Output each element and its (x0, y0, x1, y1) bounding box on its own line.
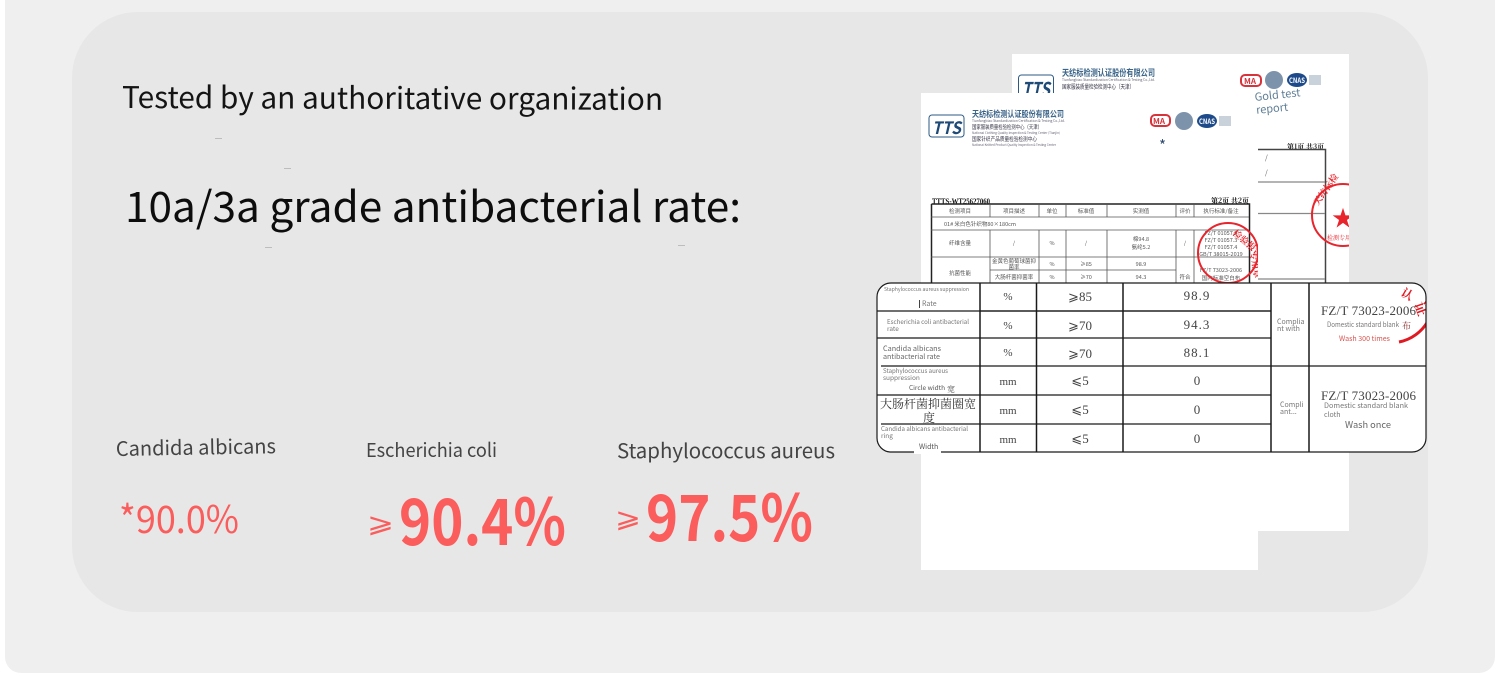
report table: FZ/T 01057.4 (1205, 243, 1237, 251)
table values: mm (999, 434, 1017, 446)
table values: % (1003, 347, 1013, 359)
table values: ⩾70 (1068, 346, 1092, 361)
company name: 天纺标检测认证股份有限公司 (972, 108, 1064, 120)
logo: TTTS (1018, 74, 1054, 93)
row label: Candida albicans antibacterial rate (883, 344, 942, 362)
table values: % (1003, 320, 1013, 332)
front report document: National Clothing Quality Inspection & Testing Center (Tianjin) (972, 131, 1060, 135)
report table: 纤维含量 (949, 239, 971, 247)
label: escherichia coli: Escherichia coli (366, 436, 497, 463)
report table (931, 204, 1266, 283)
stray marks (215, 138, 685, 248)
row label: Staphylococcus aureus inhibition width (883, 365, 955, 395)
note: gold test report: report (1255, 99, 1289, 118)
front report document (921, 93, 1266, 570)
standard cell: wash 300 times: 布 (1402, 319, 1411, 332)
value: 90.4 percent: 90.4% (399, 472, 566, 564)
logo: TTTS: TTS (1022, 75, 1052, 102)
front report document: Tianfangbiao Standardization Certification & Testing Co.,Ltd. (972, 119, 1065, 124)
report table: 金黄色葡萄球菌抑 (992, 257, 1036, 265)
value: 97.5 percent: 97.5% (646, 468, 813, 560)
note: gold test report: Gold test (1254, 84, 1301, 105)
front report document: 国家服装质量检验检测中心（天津） (972, 123, 1042, 131)
heading: antibacterial rate: 10a/3a grade antibacterial rate: (125, 174, 741, 235)
report table: ≥85 (1080, 260, 1092, 268)
table values: 0 (1194, 431, 1200, 446)
table values: ⩽5 (1071, 373, 1089, 388)
standard cell: wash once (1321, 388, 1416, 431)
report table: 棉94.8 (1133, 235, 1149, 243)
label: staphylococcus aureus: Staphylococcus aureus (617, 435, 835, 464)
report table: 氨纶5.2 (1132, 243, 1150, 251)
stat: staphylococcus aureus (615, 435, 835, 560)
front report document: National Knitted Product Quality Inspection & Testing Center (972, 143, 1057, 147)
compliance cells: Compli (1280, 400, 1304, 410)
row label: Staphylococcus aureus suppression rate: Rate (922, 299, 937, 309)
report table: % (1049, 273, 1055, 281)
report table: 大肠杆菌抑菌率 (995, 273, 1034, 281)
red stamp: ★ (1332, 201, 1354, 233)
certification logos: MA (1153, 116, 1166, 127)
standard cell: wash 300 times: FZ/T 73023-2006 (1321, 303, 1416, 318)
report table: FZ/T 01057.2 (1205, 229, 1237, 237)
standard cell: wash 300 times: Domestic standard blank (1327, 320, 1399, 330)
back report document: 国家服装质量检验检测中心（天津） (1062, 82, 1134, 91)
note: gold test report (1254, 84, 1302, 118)
row label: Staphylococcus aureus inhibition width: Staphylococcus aureus (883, 365, 948, 375)
report table: 抗菌性能 (949, 269, 971, 277)
table values: % (1003, 291, 1013, 303)
row label: Escherichia coli antibacterial rate: rate (887, 323, 899, 333)
row label: E. coli inhibition width: 大肠杆菌抑菌圈宽 (880, 395, 976, 412)
report table: 检测项目 (949, 207, 971, 215)
back report document: Tianfangbiao Standardization Certification & Testing Co.,Ltd. (1062, 78, 1155, 83)
table values: mm (999, 405, 1017, 417)
report table: ≥70 (1080, 273, 1092, 281)
symbol: greater or equal: ⩾ (615, 496, 641, 535)
title: tested by an authoritative organization: Tested by an authoritative organization (122, 73, 663, 119)
logo: TTTS: TTS (932, 114, 963, 139)
report table: / (1184, 239, 1187, 247)
red stamp (1198, 223, 1266, 283)
certification logos: CNAS (1289, 76, 1306, 86)
report table: 标准值 (1078, 207, 1095, 215)
report table: 项目描述 (1003, 207, 1025, 215)
report table: 实测值 (1133, 207, 1150, 215)
row label: Escherichia coli antibacterial rate (887, 316, 969, 333)
row label: Staphylococcus aureus suppression rate (884, 285, 969, 309)
table grid (877, 283, 1426, 452)
table values: ⩽5 (1071, 431, 1089, 446)
red stamp: 检验报告 (1230, 226, 1266, 259)
compliance cells (1277, 317, 1304, 417)
report table: 98.9 (1136, 260, 1146, 268)
table values: 98.9 (1184, 288, 1210, 303)
row label: Candida albicans antibacterial rate: antibacterial rate (883, 352, 940, 362)
row label: Staphylococcus aureus inhibition width: 宽 (947, 384, 955, 395)
report table: FZ/T 01057.3 (1205, 236, 1237, 244)
report table: / (1013, 239, 1016, 247)
value: 90.0 percent: *90.0% (119, 489, 239, 544)
row label: Candida albicans inhibition width: Width (919, 442, 938, 452)
standard cell: wash 300 times (1321, 303, 1416, 344)
asterisk mark: * (1159, 135, 1166, 156)
stamp overlap (1398, 287, 1426, 344)
row label: Staphylococcus aureus inhibition width: suppression (883, 372, 920, 382)
table values (999, 288, 1210, 446)
certification logos (1151, 112, 1231, 130)
row label: Candida albicans inhibition width: ring (881, 430, 893, 440)
standard cell: wash 300 times: Wash 300 times (1339, 334, 1391, 344)
table values: mm (999, 376, 1017, 388)
report table: / (1085, 239, 1088, 247)
report table: 单位 (1046, 207, 1058, 215)
page number: 第2页 共2页 (1211, 196, 1249, 206)
row label: Candida albicans antibacterial rate: Candida albicans (883, 344, 942, 354)
report table: 执行标准/备注 (1203, 207, 1239, 215)
compliance cells: nt with (1277, 324, 1300, 334)
symbol: greater or equal: ⩾ (367, 501, 394, 540)
report table: 评价 (1179, 207, 1191, 215)
results table (877, 283, 1433, 454)
standard cell: wash once: cloth (1324, 410, 1341, 420)
table values: 88.1 (1184, 345, 1210, 360)
standard cell: wash once: Wash once (1345, 418, 1391, 431)
stat: escherichia coli (366, 436, 566, 564)
row label: E. coli inhibition width: 度 (923, 409, 935, 426)
report table: % (1049, 239, 1055, 247)
table values: 0 (1194, 373, 1200, 388)
report table: 94.3 (1136, 273, 1146, 281)
row label: Staphylococcus aureus inhibition width: Circle width (909, 382, 945, 392)
stamp overlap: 认 (1398, 284, 1417, 304)
row label: Escherichia coli antibacterial rate: Escherichia coli antibacterial (887, 316, 969, 326)
back report document: / (1265, 168, 1268, 178)
table values: ⩾85 (1068, 289, 1092, 304)
compliance cells: ant... (1280, 407, 1297, 417)
report table: GB/T 38015-2019 (1199, 250, 1243, 258)
red stamp: 天纺标检 (1310, 171, 1341, 208)
certification logos: MA (1244, 76, 1257, 87)
report table: 国内标准空白布 (1202, 274, 1241, 282)
report table: % (1049, 260, 1055, 268)
report number: TTTS-WT25627060 (932, 197, 990, 206)
table values: 0 (1194, 402, 1200, 417)
standard cell: wash once: Domestic standard blank (1324, 401, 1408, 411)
certification logos (1241, 71, 1321, 89)
row label: E. coli inhibition width (880, 395, 976, 426)
back report document (1012, 54, 1374, 531)
red stamp: 检测专用 (1327, 233, 1351, 242)
label: candida albicans: Candida albicans (116, 430, 276, 462)
standard cell: wash once: FZ/T 73023-2006 (1321, 388, 1416, 403)
report table lines (1258, 150, 1326, 283)
report table: 菌率 (1008, 263, 1020, 271)
report table: FZ/T 73023-2006 (1200, 266, 1242, 274)
table values: ⩽5 (1071, 402, 1089, 417)
row label: Staphylococcus aureus suppression rate: Staphylococcus aureus suppression (884, 285, 969, 293)
report table: 01# 米白色针织物80×180cm (944, 220, 1016, 228)
certification logos: CNAS (1199, 117, 1216, 127)
compliance cells: Complia (1277, 317, 1304, 327)
back report document: / (1265, 153, 1268, 163)
stamp overlap: 证 (1409, 299, 1433, 319)
row label: Candida albicans inhibition width: Candida albicans antibacterial (881, 423, 968, 433)
page number: 第1页 共3页 (1287, 142, 1324, 152)
company name: 天纺标检测认证股份有限公司 (1062, 66, 1155, 79)
row label: Candida albicans inhibition width (881, 423, 968, 454)
red stamp: 专用章 (1247, 250, 1265, 279)
table values: ⩾70 (1068, 318, 1092, 333)
red stamp (1311, 174, 1349, 247)
report table: 符合 (1179, 273, 1191, 281)
stat: candida albicans (116, 430, 276, 544)
front report document: 国家针织产品质量检验检测中心 (972, 135, 1037, 143)
table values: 94.3 (1184, 317, 1210, 332)
inner content panel (72, 12, 1428, 612)
